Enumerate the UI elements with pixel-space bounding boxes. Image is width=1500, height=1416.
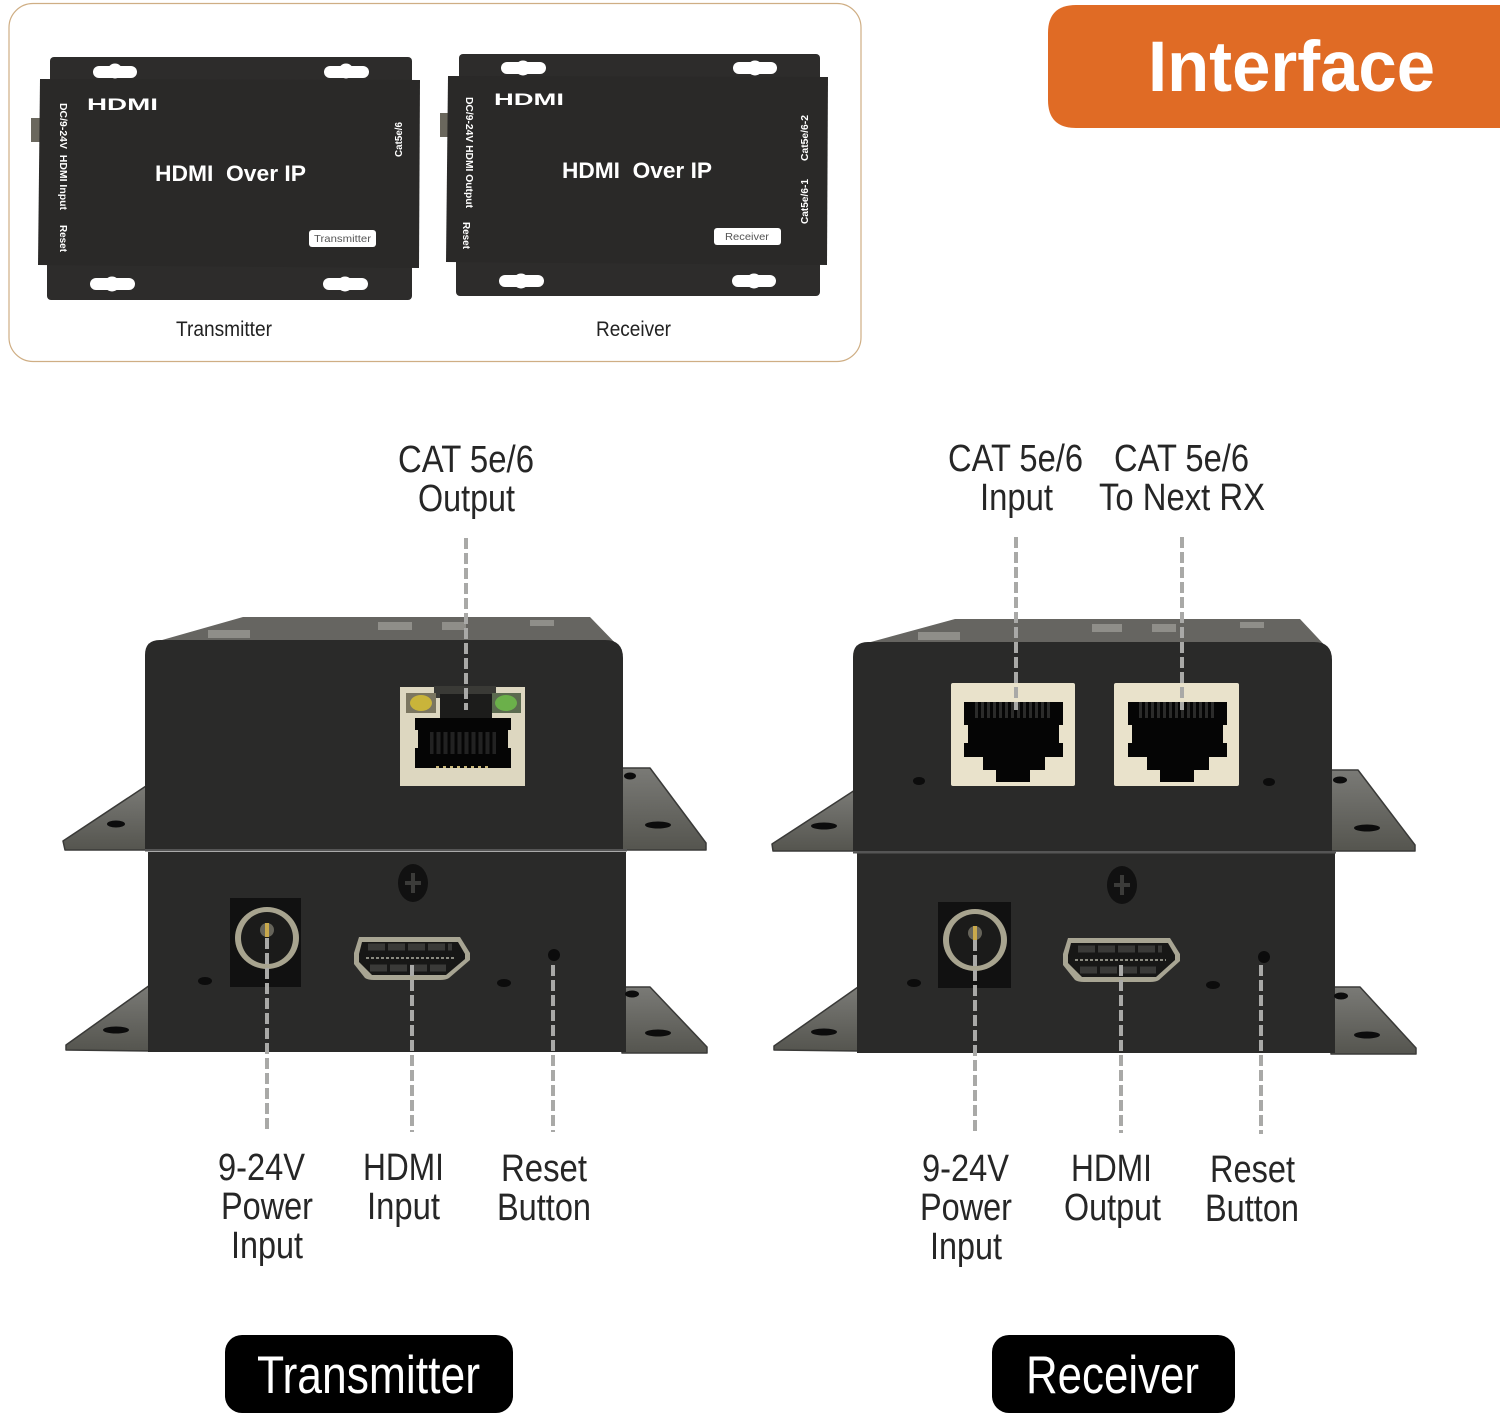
label: CAT 5e/6 Output (398, 439, 534, 520)
label: transmitter reset button: Reset (501, 1148, 587, 1190)
badge: Transmitter (225, 1335, 513, 1413)
label: receiver reset button (1205, 1149, 1299, 1230)
label: transmitter reset button: Button (497, 1187, 591, 1229)
label: HDMI Output: Output (1064, 1187, 1161, 1229)
label: HDMI Input: HDMI (363, 1147, 444, 1189)
label: receiver power input: Input (930, 1226, 1002, 1268)
device: transmitter top view: Cat5e/6 (393, 122, 405, 157)
label: transmitter power input: 9-24V (218, 1147, 306, 1189)
label: receiver power input: 9-24V (922, 1148, 1010, 1190)
device: receiver top view: Cat5e/6-1 (799, 179, 811, 224)
label: receiver reset button: Reset (1210, 1149, 1295, 1191)
label: receiver power input: Power (920, 1187, 1012, 1229)
label: CAT 5e/6 Input: Input (980, 477, 1053, 519)
device: transmitter top view: HDMI (87, 95, 158, 114)
device: transmitter top view: HDMI Over IP (155, 161, 306, 186)
label: CAT 5e/6 To Next RX: To Next RX (1099, 477, 1265, 519)
callout lines: transmitter (267, 538, 553, 1132)
device: receiver top view: Cat5e/6-2 (799, 115, 811, 161)
label: HDMI Output: HDMI (1071, 1148, 1152, 1190)
label: CAT 5e/6 Output: Output (418, 478, 515, 520)
caption: receiver: Receiver (596, 318, 671, 341)
device: transmitter rear views (63, 617, 707, 1053)
device: receiver top view (440, 54, 828, 296)
label: receiver power input (920, 1148, 1012, 1268)
label: transmitter power input: Power (221, 1186, 313, 1228)
device: receiver rear views (772, 619, 1416, 1054)
device: receiver top view: HDMI Over IP (562, 158, 712, 183)
label: CAT 5e/6 Input: CAT 5e/6 (948, 438, 1083, 480)
label: HDMI Input (363, 1147, 444, 1228)
label: receiver reset button: Button (1205, 1188, 1299, 1230)
device: transmitter top view: Reset (57, 225, 69, 252)
device: receiver top view: Reset (460, 222, 472, 249)
device: receiver top view: Receiver (725, 232, 770, 243)
caption: transmitter: Transmitter (176, 318, 272, 341)
device: receiver top view: DC/9-24V HDMI Output (463, 97, 475, 208)
label: transmitter reset button (497, 1148, 591, 1229)
badge: Receiver (992, 1335, 1235, 1413)
badge: Transmitter: Transmitter (257, 1346, 480, 1405)
badge: Receiver: Receiver (1026, 1346, 1199, 1405)
device: transmitter top view: Transmitter (314, 233, 372, 245)
label: CAT 5e/6 To Next RX: CAT 5e/6 (1114, 438, 1249, 480)
label: HDMI Input: Input (367, 1186, 440, 1228)
label: transmitter power input (218, 1147, 313, 1267)
device: transmitter top view: DC/9-24V HDMI Input (57, 103, 69, 210)
label: HDMI Output (1064, 1148, 1161, 1229)
label: CAT 5e/6 Input (948, 438, 1083, 519)
title: Interface: Interface (1148, 28, 1435, 107)
label: CAT 5e/6 Output: CAT 5e/6 (398, 439, 534, 481)
title: Interface (1048, 5, 1500, 128)
label: transmitter power input: Input (231, 1225, 303, 1267)
device: receiver top view: HDMI (494, 90, 564, 109)
panel: product photos (9, 4, 861, 362)
callout lines: receiver (975, 537, 1261, 1134)
label: CAT 5e/6 To Next RX (1099, 438, 1265, 519)
device: transmitter top view (31, 57, 420, 300)
